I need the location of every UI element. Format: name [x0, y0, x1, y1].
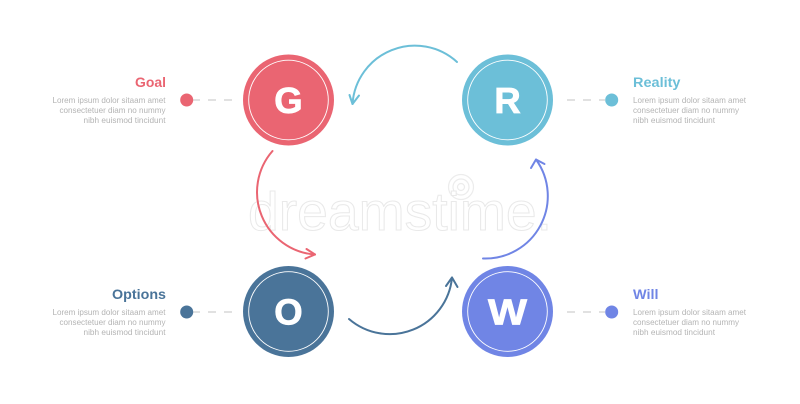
options connector [180, 306, 232, 318]
panel: will [462, 266, 747, 357]
reality text: nibh euismod tincidunt [633, 115, 716, 125]
arrow: reality to goal [350, 46, 457, 104]
arrow: goal to options [257, 151, 315, 258]
will circle: W [488, 292, 528, 332]
will text: nibh euismod tincidunt [633, 327, 716, 337]
reality text [633, 75, 747, 125]
goal text: Lorem ipsum dolor sitaam amet [52, 95, 166, 105]
panel: options [52, 266, 334, 357]
goal circle [243, 54, 334, 146]
goal circle: G [274, 80, 303, 121]
goal text: Goal [135, 75, 166, 90]
goal text: consectetuer diam no nummy [60, 105, 166, 115]
arrow: will to reality [483, 160, 548, 259]
arrow: options to will [349, 278, 458, 334]
will text: Lorem ipsum dolor sitaam amet [633, 307, 747, 317]
watermark: dreamstime. [248, 182, 552, 242]
will circle [462, 266, 553, 357]
options circle: O [274, 292, 303, 332]
goal connector [180, 94, 232, 106]
will text: Will [633, 287, 658, 302]
will text [633, 287, 747, 337]
options text [52, 287, 166, 337]
reality text: Reality [633, 75, 681, 90]
reality text: consectetuer diam no nummy [633, 105, 740, 115]
options text: consectetuer diam no nummy [60, 317, 166, 327]
options text: nibh euismod tincidunt [84, 327, 166, 337]
panel: goal [52, 54, 334, 146]
will text: consectetuer diam no nummy [633, 317, 740, 327]
panel: reality [462, 54, 747, 146]
options circle [243, 266, 334, 357]
goal text [52, 75, 166, 125]
goal text: nibh euismod tincidunt [84, 115, 166, 125]
options text: Lorem ipsum dolor sitaam amet [52, 307, 166, 317]
options text: Options [112, 287, 166, 302]
reality circle [462, 54, 553, 146]
reality circle: R [494, 80, 521, 121]
will connector [567, 306, 618, 318]
reality connector [567, 94, 618, 106]
reality text: Lorem ipsum dolor sitaam amet [633, 95, 747, 105]
